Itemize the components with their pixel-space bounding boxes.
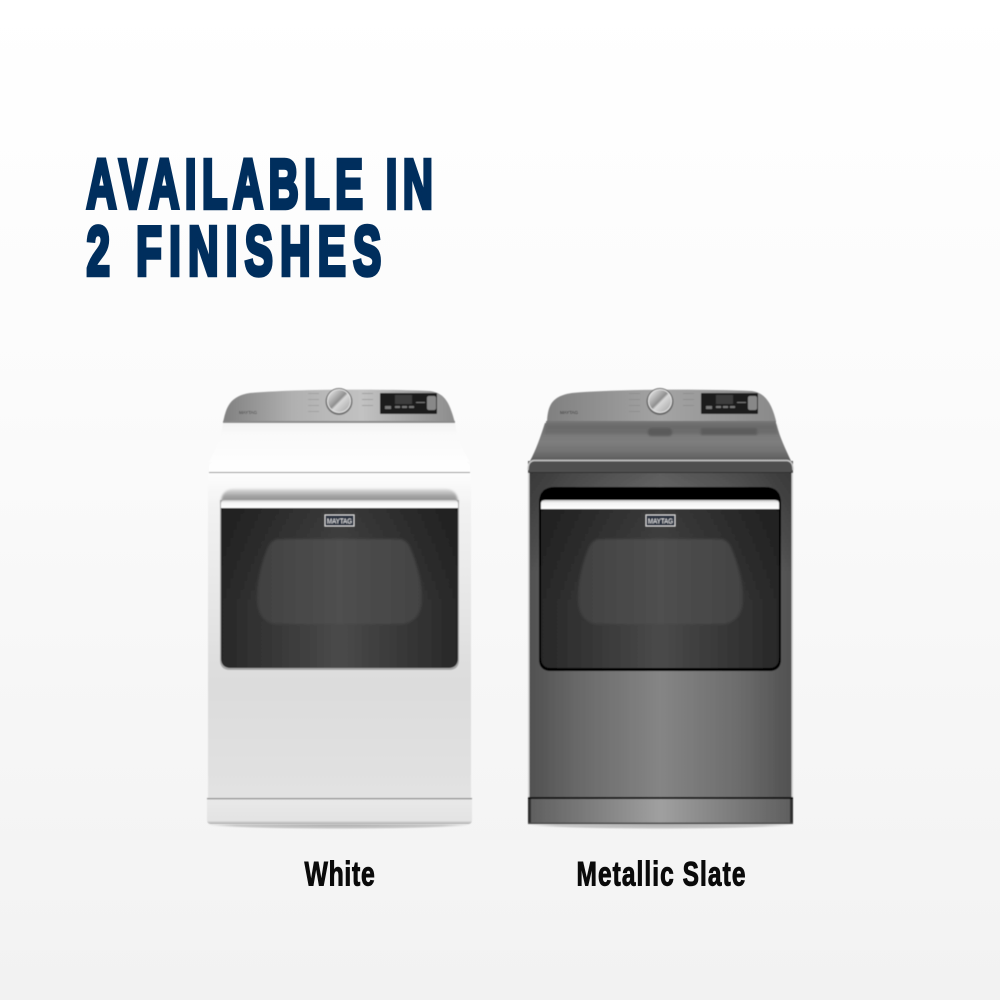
dial: [646, 388, 674, 415]
dryer: white finish: [207, 388, 472, 829]
door window: [578, 539, 743, 624]
control console: MAYTAG: [239, 410, 257, 415]
title: [86, 145, 438, 290]
title: AVAILABLE IN: [86, 145, 438, 223]
display panel: [380, 393, 437, 414]
door window: [257, 539, 422, 624]
control console: [546, 388, 776, 423]
door recess: [221, 489, 458, 504]
base: [528, 797, 793, 824]
label: Metallic Slate: Metallic Slate: [576, 856, 746, 894]
front band: [209, 462, 470, 473]
logo badge: [646, 515, 675, 526]
label: White: White: [304, 856, 376, 894]
door: [220, 500, 459, 670]
handle: [221, 500, 458, 508]
handle: [541, 500, 779, 509]
logo badge: [325, 515, 354, 526]
logo badge: MAYTAG: [327, 518, 352, 525]
dryer: metallic slate finish: [528, 388, 793, 829]
base: [207, 798, 472, 824]
door: [539, 487, 781, 671]
top lid: [530, 423, 791, 461]
front band: [528, 460, 793, 473]
display panel: [701, 393, 758, 414]
logo badge: MAYTAG: [648, 518, 673, 525]
top lid: [209, 423, 470, 462]
title: 2 FINISHES: [86, 212, 388, 290]
dial: [326, 388, 352, 415]
control console: [223, 388, 455, 423]
cabinet body: [208, 473, 471, 798]
cabinet body: [528, 473, 793, 798]
control console: MAYTAG: [560, 410, 578, 415]
